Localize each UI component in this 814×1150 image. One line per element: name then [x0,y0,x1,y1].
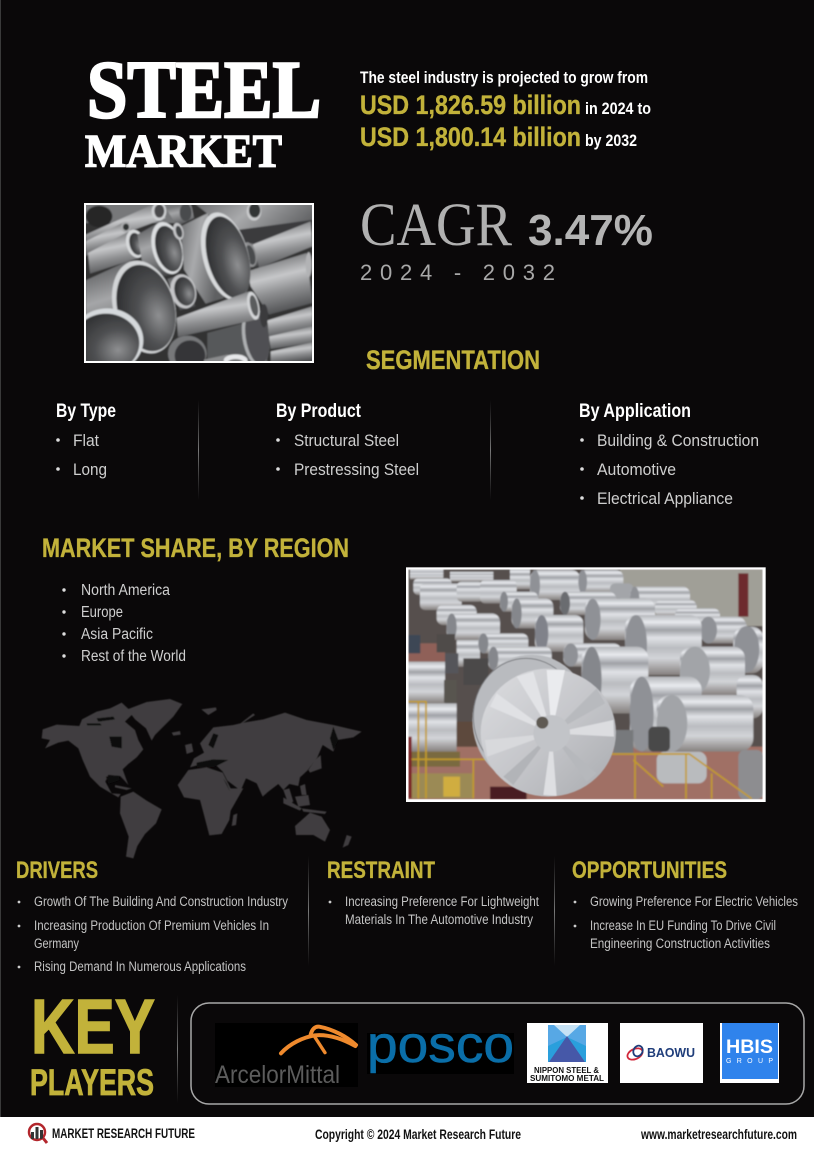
title: Steel Market: STEEL [87,44,321,135]
heading: key players [30,984,155,1103]
segment: by type: Flat [73,431,99,450]
logo: HBIS Group: GROUP [726,1058,773,1065]
segment: by product: By Product [276,401,362,422]
segment: by type [56,401,116,479]
panel: drivers: Increasing Production Of Premium Vehicles In [34,918,269,933]
heading: market share by region: MARKET SHARE, BY REGION [42,533,349,563]
big coil in foreground [472,655,616,797]
logo: Nippon Steel and Sumitomo Metal [527,1023,608,1083]
panel: drivers: Rising Demand In Numerous Applications [34,959,246,974]
panel: opportunities: OPPORTUNITIES [572,857,727,884]
text block: market growth projection: USD 1,800.14 billion [360,122,581,152]
heading: key players: PLAYERS [30,1062,154,1103]
text block: market growth projection: by 2032 [585,132,637,150]
image: steel pipes [84,203,314,363]
heading: segmentation: SEGMENTATION [366,345,540,375]
logo: HBIS Group: HBIS [726,1037,773,1058]
logo: POSCO: posco [367,1016,514,1074]
panel: restraint [327,857,539,927]
icon: market research future magnifier [29,1124,47,1143]
title: Steel Market [85,44,321,178]
panel: drivers: Germany [34,936,79,951]
region list: North America [81,582,170,599]
panel: restraint: Increasing Preference For Lightweight [345,894,539,909]
world map [42,699,362,858]
segment: by application: Electrical Appliance [597,489,733,508]
text block: market growth projection [360,69,651,152]
region list: Europe [81,604,123,621]
logo: Nippon Steel and Sumitomo Metal: NIPPON STEEL & [534,1066,599,1075]
segment: by type: Long [73,460,107,479]
segment: by application: By Application [579,401,691,422]
panel: opportunities: Engineering Construction Activities [590,936,770,951]
region list: Asia Pacific [81,626,153,643]
footer: MARKET RESEARCH FUTURE [52,1126,195,1141]
segment: by product: Prestressing Steel [294,460,419,479]
panel: company logos [191,1003,804,1104]
logo: ArcelorMittal [215,1023,358,1089]
region list: Rest of the World [81,648,186,665]
panel: restraint: RESTRAINT [327,857,435,884]
logo: Baowu [620,1023,703,1083]
panel: drivers [16,857,288,974]
text block: market growth projection: USD 1,826.59 billion [360,90,581,120]
forecast period: 2024 - 2032 [360,260,555,285]
panel: drivers: DRIVERS [16,857,98,884]
logo: Baowu: BAOWU [647,1046,695,1060]
segment: by application [579,401,759,508]
title: Steel Market: MARKET [85,126,282,178]
panel: opportunities [572,857,798,951]
heading: key players: KEY [31,984,155,1070]
segment: by type: By Type [56,401,116,422]
CAGR figure: CAGR [360,192,512,259]
segment: by product: Structural Steel [294,431,399,450]
logo: Nippon Steel and Sumitomo Metal: SUMITOMO METAL [530,1074,604,1083]
footer [0,1117,814,1150]
footer: Copyright © 2024 Market Research Future [315,1127,521,1142]
segment: by application: Automotive [597,460,676,479]
region list [62,582,186,665]
image: steel coils [406,567,766,802]
CAGR figure: 3.47% [528,206,653,255]
segment: by application: Building & Construction [597,431,759,450]
logo: HBIS Group [720,1023,779,1083]
CAGR figure [360,192,653,259]
panel: restraint: Materials In The Automotive Industry [345,912,533,927]
logo: ArcelorMittal: ArcelorMittal [215,1061,340,1089]
panel: opportunities: Increase In EU Funding To Drive Civil [590,918,776,933]
panel: drivers: Growth Of The Building And Construction Industry [34,894,288,909]
text block: market growth projection: The steel industry is projected to grow from [360,69,648,87]
text block: market growth projection: in 2024 to [585,100,651,118]
segment: by product [276,401,419,479]
